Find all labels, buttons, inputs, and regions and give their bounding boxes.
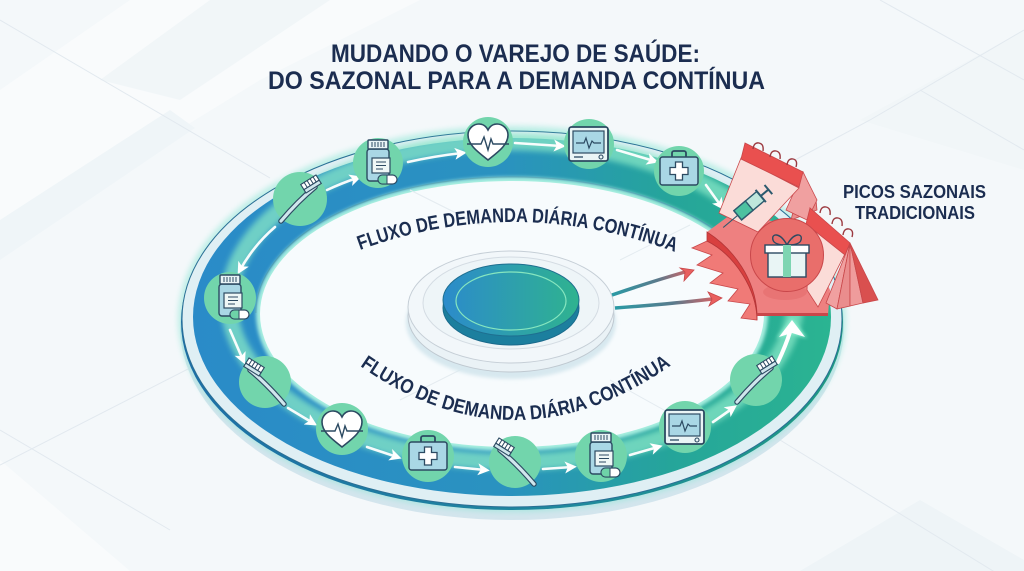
icon: medical kit bottom bbox=[402, 430, 454, 482]
icon: toothbrush right bbox=[730, 354, 782, 406]
icon: medical kit top bbox=[654, 146, 704, 196]
icon: bottle left bbox=[204, 272, 256, 324]
icon: bottle bottom bbox=[575, 430, 627, 482]
icon: monitor top bbox=[564, 119, 614, 169]
curved label bottom: FLUXO DE DEMANDA DIÁRIA CONTÍNUA bbox=[361, 355, 671, 420]
icon: toothbrush left bbox=[239, 356, 291, 408]
title bbox=[268, 38, 765, 95]
icon: toothbrush top bbox=[273, 172, 327, 226]
calendar with syringe bbox=[718, 143, 817, 234]
icon: toothbrush bottom bbox=[489, 436, 541, 488]
flow arrows bbox=[230, 143, 733, 470]
continuous demand ring bbox=[178, 126, 846, 520]
big arrow into peak bbox=[777, 318, 807, 362]
icon: monitor bottom bbox=[659, 401, 711, 453]
flow path glow bbox=[229, 142, 795, 462]
icon: heart bottom bbox=[316, 403, 368, 455]
seasonal peak block bbox=[692, 215, 830, 320]
icon: gift badge bbox=[750, 218, 824, 300]
title: DO SAZONAL PARA A DEMANDA CONTÍNUA bbox=[268, 66, 765, 95]
icon: syringe bbox=[718, 183, 774, 234]
central platform bbox=[406, 251, 616, 379]
calendar with gift bbox=[806, 207, 878, 309]
label: seasonal peaks bbox=[843, 181, 986, 223]
label: seasonal peaks: PICOS SAZONAIS bbox=[843, 181, 986, 202]
title: MUDANDO O VAREJO DE SAÚDE: bbox=[331, 38, 700, 68]
curved label top: FLUXO DE DEMANDA DIÁRIA CONTÍNUA bbox=[356, 206, 676, 252]
icon: bottle top bbox=[353, 138, 403, 188]
arrows from platform to seasonal peak bbox=[612, 268, 722, 308]
label: seasonal peaks: TRADICIONAIS bbox=[855, 202, 975, 223]
icon: heart top bbox=[463, 117, 513, 167]
